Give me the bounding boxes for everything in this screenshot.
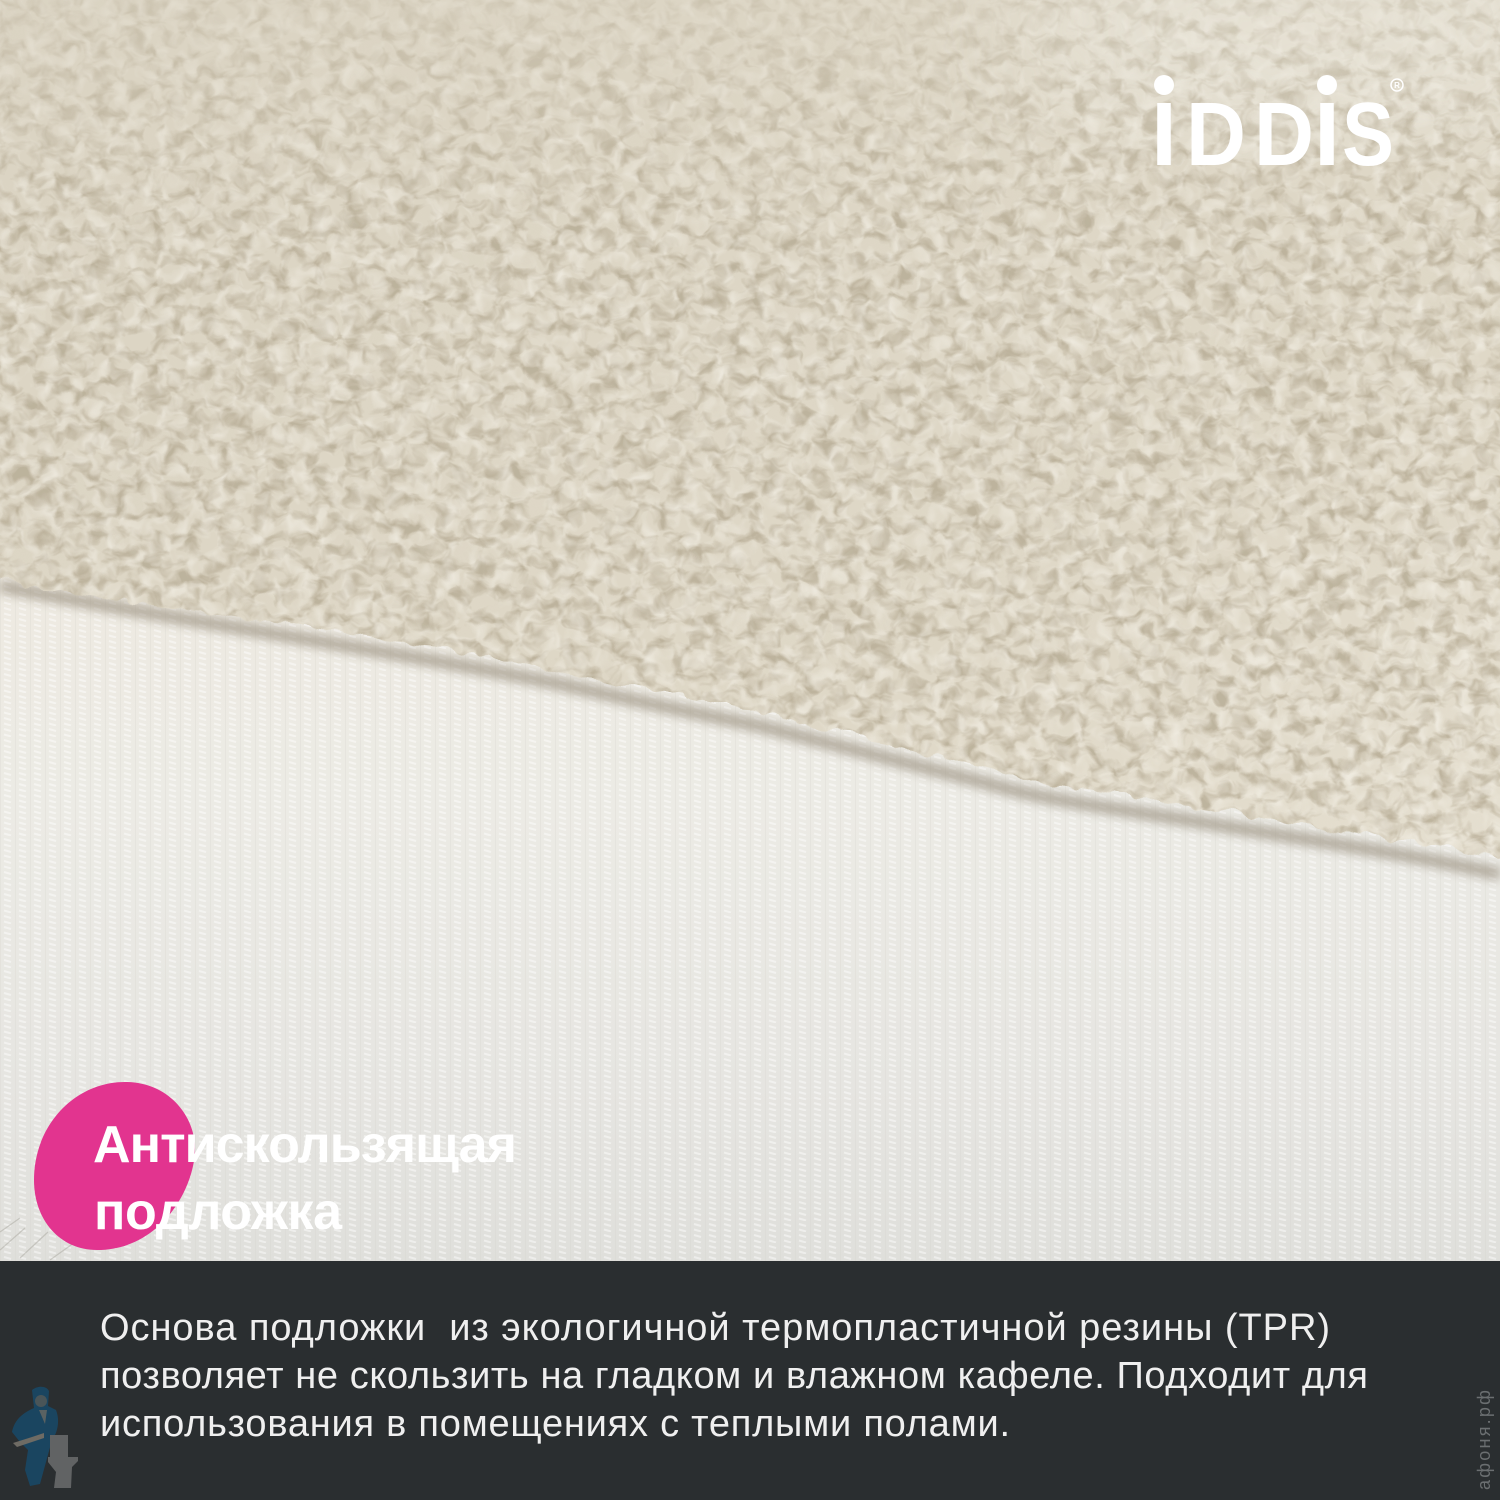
pink blob behind heading — [34, 1082, 195, 1250]
mat backing — [0, 560, 1500, 1262]
logo: IDDIS: D — [1254, 85, 1314, 185]
watermark site name: афоня.рф — [1474, 1390, 1494, 1490]
description text — [100, 1307, 1368, 1445]
icon: plumber with toilet watermark — [12, 1387, 78, 1488]
logo: IDDIS — [1151, 75, 1403, 185]
logo: IDDIS: S — [1342, 85, 1394, 185]
logo: IDDIS: D — [1186, 85, 1246, 185]
heading — [93, 1116, 517, 1241]
description text: использования в помещениях с теплыми полами. — [100, 1403, 1010, 1445]
logo: IDDIS: I — [1314, 85, 1340, 185]
rug shadow on backing — [0, 586, 1500, 874]
description text: позволяет не скользить на гладком и влажном кафеле. Подходит для — [100, 1355, 1368, 1397]
rug pile — [0, 0, 1500, 900]
dark footer band — [0, 1261, 1500, 1500]
logo: IDDIS: I — [1151, 85, 1177, 185]
heading: Антискользящая — [93, 1116, 517, 1174]
heading: подложка — [94, 1183, 343, 1241]
logo: IDDIS: R — [1394, 81, 1400, 90]
toilet — [48, 1435, 78, 1488]
description text: Основа подложки из экологичной термопластичной резины (TPR) — [100, 1307, 1330, 1349]
plumber figure — [12, 1387, 58, 1486]
